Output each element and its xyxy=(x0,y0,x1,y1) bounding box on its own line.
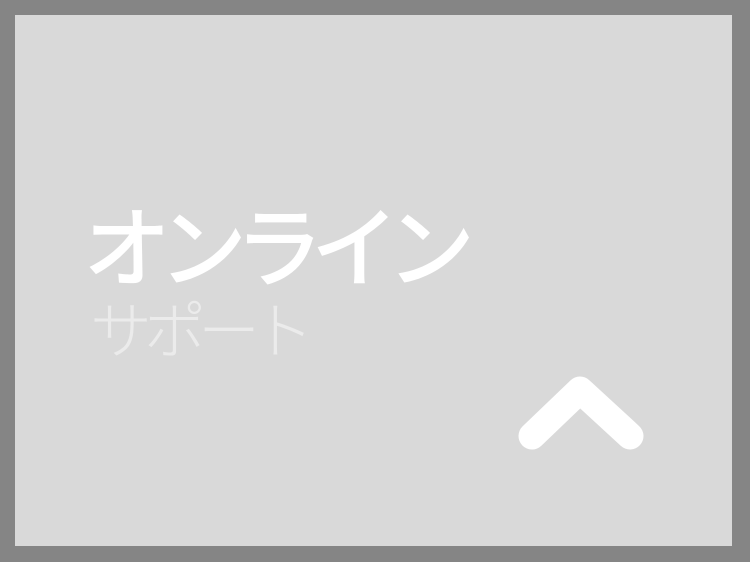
subtitle: サポート xyxy=(90,298,306,367)
title: オンライン xyxy=(83,200,463,299)
